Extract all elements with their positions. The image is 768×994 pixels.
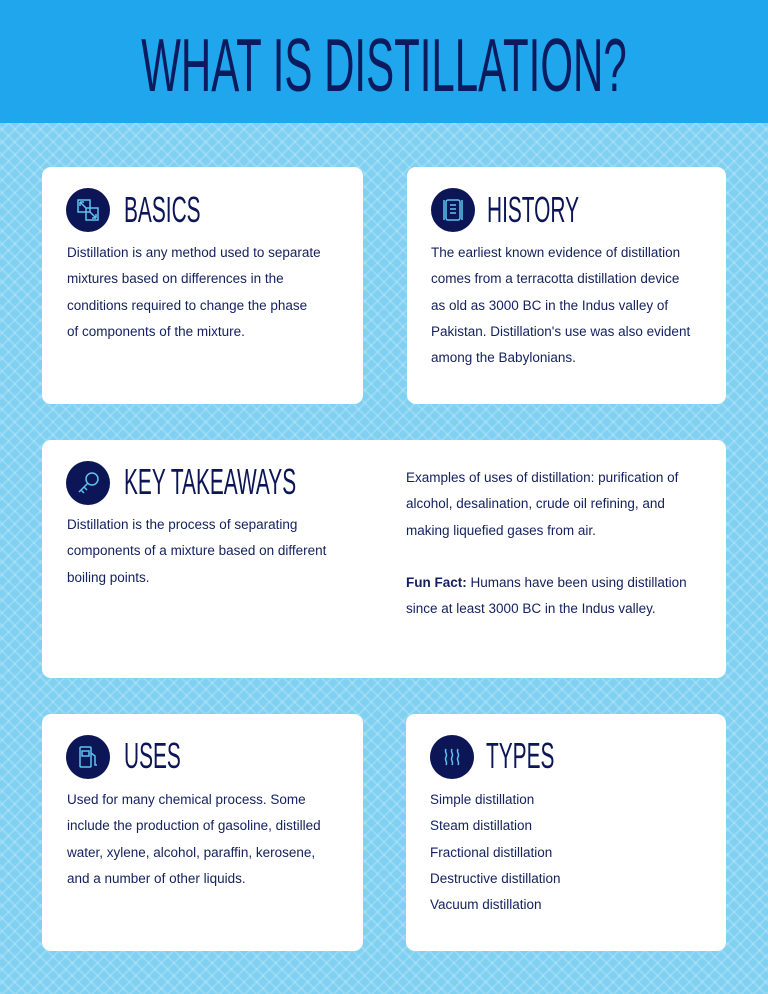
panel: key takeaways <box>42 440 726 678</box>
icon: key <box>66 461 110 505</box>
heading: USES <box>124 735 181 776</box>
text right <box>406 470 687 616</box>
text: include the production of gasoline, distilled <box>67 818 321 833</box>
icon: arrows <box>66 188 110 232</box>
panel: history <box>407 167 726 404</box>
header band <box>0 0 768 123</box>
text left <box>67 517 326 585</box>
text: Steam distillation <box>430 818 532 833</box>
text: Fractional distillation <box>430 845 552 860</box>
text: among the Babylonians. <box>431 350 576 365</box>
text: comes from a terracotta distillation device <box>431 271 679 286</box>
text right: Fun Fact: Humans have been using distillation <box>406 575 687 590</box>
heading: KEY TAKEAWAYS <box>124 461 296 502</box>
heading: HISTORY <box>487 189 579 230</box>
text: as old as 3000 BC in the Indus valley of <box>431 298 668 313</box>
text: Destructive distillation <box>430 871 561 886</box>
text: mixtures based on differences in the <box>67 271 284 286</box>
text <box>430 792 561 912</box>
text right: Examples of uses of distillation: purification of <box>406 470 678 485</box>
heading: BASICS <box>124 189 201 230</box>
heading: TYPES <box>486 735 554 776</box>
text: and a number of other liquids. <box>67 871 246 886</box>
text <box>431 245 690 365</box>
text right: alcohol, desalination, crude oil refining, and <box>406 496 665 511</box>
panel: uses <box>42 714 363 951</box>
title: WHAT IS DISTILLATION? <box>141 23 627 107</box>
text <box>67 245 321 339</box>
text: The earliest known evidence of distillation <box>431 245 680 260</box>
text right: since at least 3000 BC in the Indus valley. <box>406 601 656 616</box>
text: of components of the mixture. <box>67 324 245 339</box>
text: Distillation is any method used to separate <box>67 245 321 260</box>
text: Simple distillation <box>430 792 534 807</box>
text right: making liquefied gases from air. <box>406 523 596 538</box>
icon: scroll <box>431 188 475 232</box>
text left: boiling points. <box>67 570 150 585</box>
text: Used for many chemical process. Some <box>67 792 306 807</box>
text: Pakistan. Distillation's use was also evident <box>431 324 690 339</box>
text left: components of a mixture based on different <box>67 543 326 558</box>
panel: types <box>406 714 726 951</box>
panel: basics <box>42 167 363 404</box>
icon: fuel pump <box>66 735 110 779</box>
text left: Distillation is the process of separating <box>67 517 297 532</box>
text: water, xylene, alcohol, paraffin, kerosene, <box>67 845 315 860</box>
icon: steam <box>430 735 474 779</box>
text <box>67 792 321 886</box>
text: conditions required to change the phase <box>67 298 307 313</box>
text: Vacuum distillation <box>430 897 542 912</box>
